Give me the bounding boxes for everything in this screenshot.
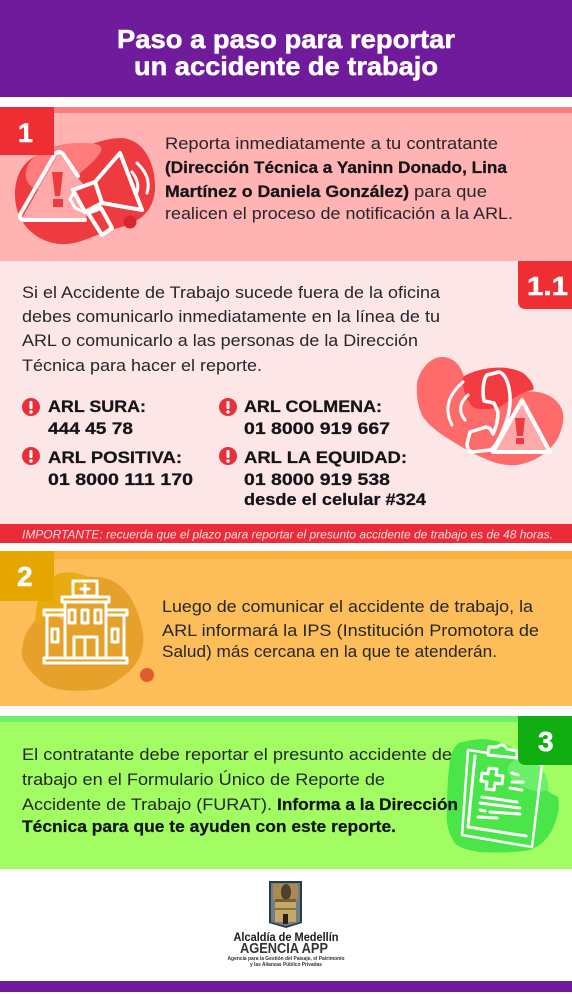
text: step 1.1 description [22,283,441,375]
list: ARL contacts, right column [219,397,427,509]
text: step 1.1 description: Si el Accidente de Trabajo sucede fuera de la oficina [22,283,441,302]
footer logo: Alcaldía de Medellín, Agencia APP: Agencia para la Gestión del Paisaje, el Patrimonio [228,956,345,962]
text: step 2 description: Salud) más cercana en la que te atenderán. [162,642,497,661]
icon: alert [219,398,237,416]
contact: ARL Colmena: 01 8000 919 667 [244,419,390,438]
text: step 3 description: trabajo en el Formulario Único de Reporte de [22,770,385,789]
text: step 3 description: Informa a la Dirección [277,795,458,814]
contact: ARL La Equidad: 01 8000 919 538 [244,470,390,489]
icon: hospital [22,572,154,691]
list: ARL contacts, left column [22,397,193,489]
contact: ARL Colmena [244,397,390,438]
badge: 3 [518,716,572,765]
text: step 3 description: Accidente de Trabajo (FURAT). [22,795,272,814]
badge: 2 [0,551,54,601]
text: step 1 description: Reporta inmediatamente a tu contratante [165,134,498,153]
contact: ARL La Equidad: desde el celular #324 [244,490,427,509]
title [117,24,455,81]
text: step 2 description: ARL informará la IPS (Institución Promotora de [162,621,539,640]
icon: alert [219,447,237,465]
text: step 3 description [22,745,458,836]
badge: 1: 1 [18,118,33,148]
callout: important notice [0,524,572,543]
contact: ARL La Equidad [244,448,427,509]
footer logo: Alcaldía de Medellín, Agencia APP: Alcaldía de Medellín [234,932,338,944]
badge: 1 [0,107,54,155]
panel: step 1 [0,107,572,261]
text: step 1 description [165,134,513,223]
panel: step 1.1 [0,261,572,524]
text: step 1.1 description: ARL o comunicarlo a las personas de la Dirección [22,331,418,350]
badge: 1.1: 1.1 [527,271,568,301]
contact: ARL Positiva [48,448,193,489]
title: Paso a paso para reportar [117,24,455,54]
contact: ARL Positiva: ARL POSITIVA: [48,448,182,467]
footer logo: Alcaldía de Medellín, Agencia APP: AGENCIA APP [240,941,328,957]
panel: step 3 [0,716,572,869]
footer band [0,981,572,992]
text: step 3 description: Técnica para que te ayuden con este reporte. [22,817,396,836]
callout: important notice: IMPORTANTE: recuerda que el plazo para reportar el presunto accidente de trabajo es de 48 horas. [22,528,553,542]
text: step 1 description: para que [414,182,487,201]
footer logo: Alcaldía de Medellín, Agencia APP: y las Alianzas Público Privadas [250,962,322,968]
badge: 1.1 [518,261,572,309]
title: un accidente de trabajo [134,51,438,81]
contact: ARL Positiva: 01 8000 111 170 [48,470,193,489]
footer logo: Alcaldía de Medellín, Agencia APP [228,881,345,968]
text: step 2 description [162,597,539,661]
header band [0,0,572,97]
text: step 1 description: Martínez o Daniela González) [165,182,409,201]
icon: alert [22,398,40,416]
text: step 1.1 description: debes comunicarlo inmediatamente en la línea de tu [22,307,440,326]
text: step 1 description: realicen el proceso de notificación a la ARL. [165,204,513,223]
contact: ARL La Equidad: ARL LA EQUIDAD: [244,448,407,467]
text: step 2 description: Luego de comunicar el accidente de trabajo, la [162,597,534,616]
icon: phone and warning triangle [417,357,563,465]
text: step 1 description: (Dirección Técnica a Yaninn Donado, Lina [165,158,508,177]
icon: warning triangle and megaphone [15,138,155,244]
panel: step 2 [0,551,572,706]
text: step 1.1 description: Técnica para hacer el reporte. [22,356,262,375]
contact: ARL Sura [48,397,146,438]
contact: ARL Sura: ARL SURA: [48,397,146,416]
icon: coat of arms [269,881,302,928]
badge: 2: 2 [17,561,33,592]
badge: 3: 3 [538,726,554,757]
contact: ARL Sura: 444 45 78 [48,419,133,438]
icon: alert [22,447,40,465]
contact: ARL Colmena: ARL COLMENA: [244,397,382,416]
text: step 3 description: El contratante debe reportar el presunto accidente de [22,745,452,764]
icon: clipboard [447,739,559,853]
